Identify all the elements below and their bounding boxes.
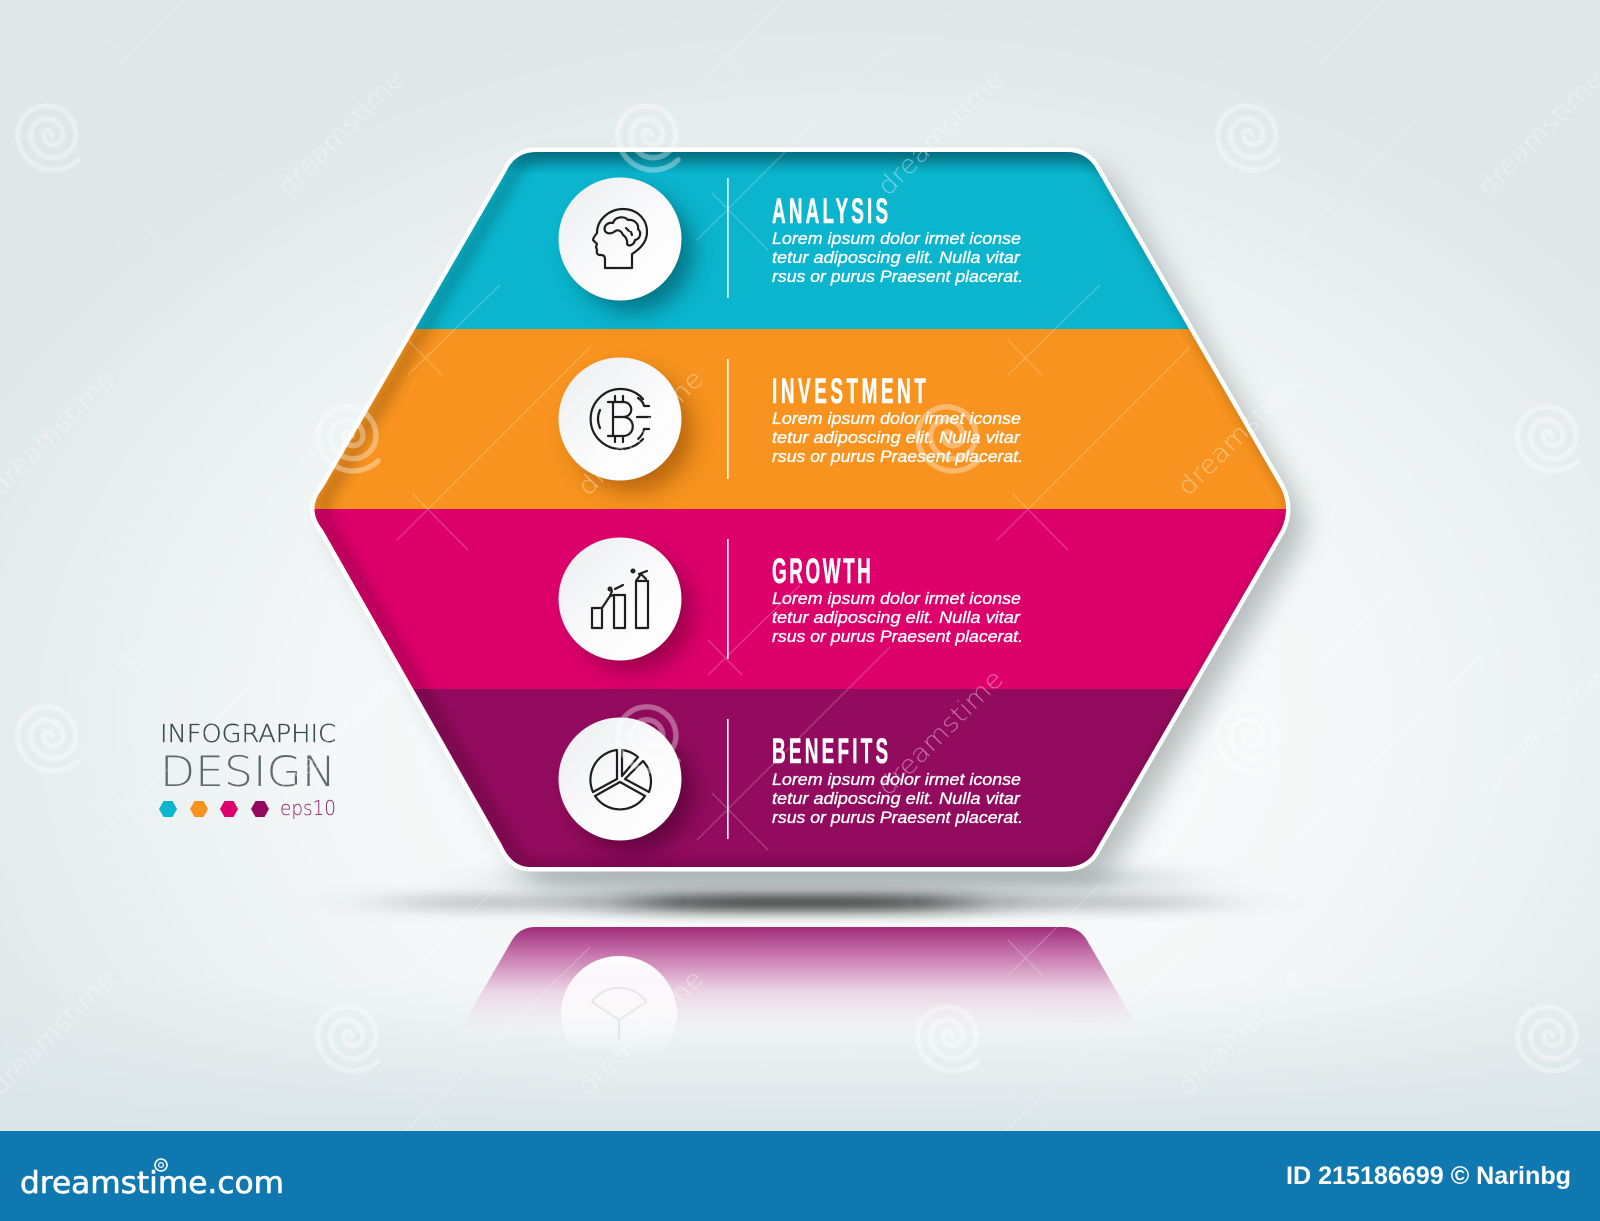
band: analysis xyxy=(414,152,1190,330)
text: benefits: tetur adiposcing elit. Nulla vitar xyxy=(772,789,1021,808)
text: growth: rsus or purus Praesent placerat. xyxy=(772,627,1023,646)
text: analysis: tetur adiposcing elit. Nulla vitar xyxy=(772,248,1021,267)
icon: pie chart xyxy=(590,750,651,809)
icon: growth bars xyxy=(592,570,648,628)
text: analysis: rsus or purus Praesent placerat. xyxy=(772,267,1023,286)
text: growth xyxy=(772,552,1023,646)
icon: bitcoin xyxy=(591,389,650,449)
hexagon bands xyxy=(300,150,1300,869)
circle: benefits xyxy=(558,718,693,852)
text: benefits xyxy=(772,732,1023,827)
text: growth: GROWTH xyxy=(772,552,871,590)
icon: head with brain xyxy=(593,209,647,268)
text: benefits: rsus or purus Praesent placerat. xyxy=(772,808,1023,827)
watermark wordmarks: dreamstime xyxy=(872,64,1009,201)
watermark wordmarks: dreamstime xyxy=(1472,64,1600,201)
footer logo: dreamstime.com xyxy=(20,1166,284,1201)
hexagon drop shadow xyxy=(332,168,1304,883)
band: investment xyxy=(300,329,1300,510)
watermark wordmarks: dreamstime xyxy=(272,664,409,801)
divider: investment xyxy=(727,359,729,479)
divider: analysis xyxy=(727,178,729,298)
watermark wordmarks: dreamstime xyxy=(1172,964,1309,1101)
inner shadow xyxy=(322,153,1294,868)
watermark wordmarks: dreamstime xyxy=(272,64,409,201)
text: benefits: BENEFITS xyxy=(772,732,888,770)
band: benefits xyxy=(413,689,1189,867)
divider: growth xyxy=(727,539,729,659)
text: investment: INVESTMENT xyxy=(772,372,926,410)
text: growth: tetur adiposcing elit. Nulla vitar xyxy=(772,608,1021,627)
watermark wordmarks: dreamstime xyxy=(872,664,1009,801)
band: growth xyxy=(300,509,1300,690)
watermark wordmarks: dreamstime xyxy=(572,364,709,501)
text: analysis: ANALYSIS xyxy=(772,192,888,230)
watermark wordmarks: dreamstime xyxy=(1472,664,1600,801)
watermark wordmarks: dreamstime xyxy=(572,964,709,1101)
watermark wordmarks: dreamstime xyxy=(1172,364,1309,501)
text: investment: rsus or purus Praesent placerat. xyxy=(772,447,1023,466)
floor shadow xyxy=(400,870,1200,910)
title block: infographic design: INFOGRAPHIC xyxy=(160,719,336,748)
title block: infographic design xyxy=(159,719,336,820)
text: growth: Lorem ipsum dolor irmet iconse xyxy=(772,589,1021,608)
circle: investment xyxy=(558,358,693,492)
top edge shade xyxy=(507,152,1096,170)
reflection of hexagon xyxy=(454,927,1145,1072)
text: analysis xyxy=(772,192,1023,286)
text: investment xyxy=(772,372,1023,466)
text: benefits: Lorem ipsum dolor irmet iconse xyxy=(772,770,1021,789)
circle: growth xyxy=(558,538,693,672)
divider: benefits xyxy=(727,719,729,839)
circle: analysis xyxy=(558,178,693,312)
text: investment: Lorem ipsum dolor irmet iconse xyxy=(772,409,1021,428)
hexagon white border xyxy=(314,152,1286,867)
title block: infographic design: DESIGN xyxy=(160,747,336,796)
watermark spirals xyxy=(18,106,1578,1071)
title block: infographic design: eps10 xyxy=(280,796,336,820)
footer image id: ID 215186699 © Narinbg xyxy=(1286,1162,1571,1190)
text: analysis: Lorem ipsum dolor irmet iconse xyxy=(772,229,1021,248)
footer bar xyxy=(0,1131,1600,1221)
legend hexagons xyxy=(159,801,269,817)
text: investment: tetur adiposcing elit. Nulla vitar xyxy=(772,428,1021,447)
